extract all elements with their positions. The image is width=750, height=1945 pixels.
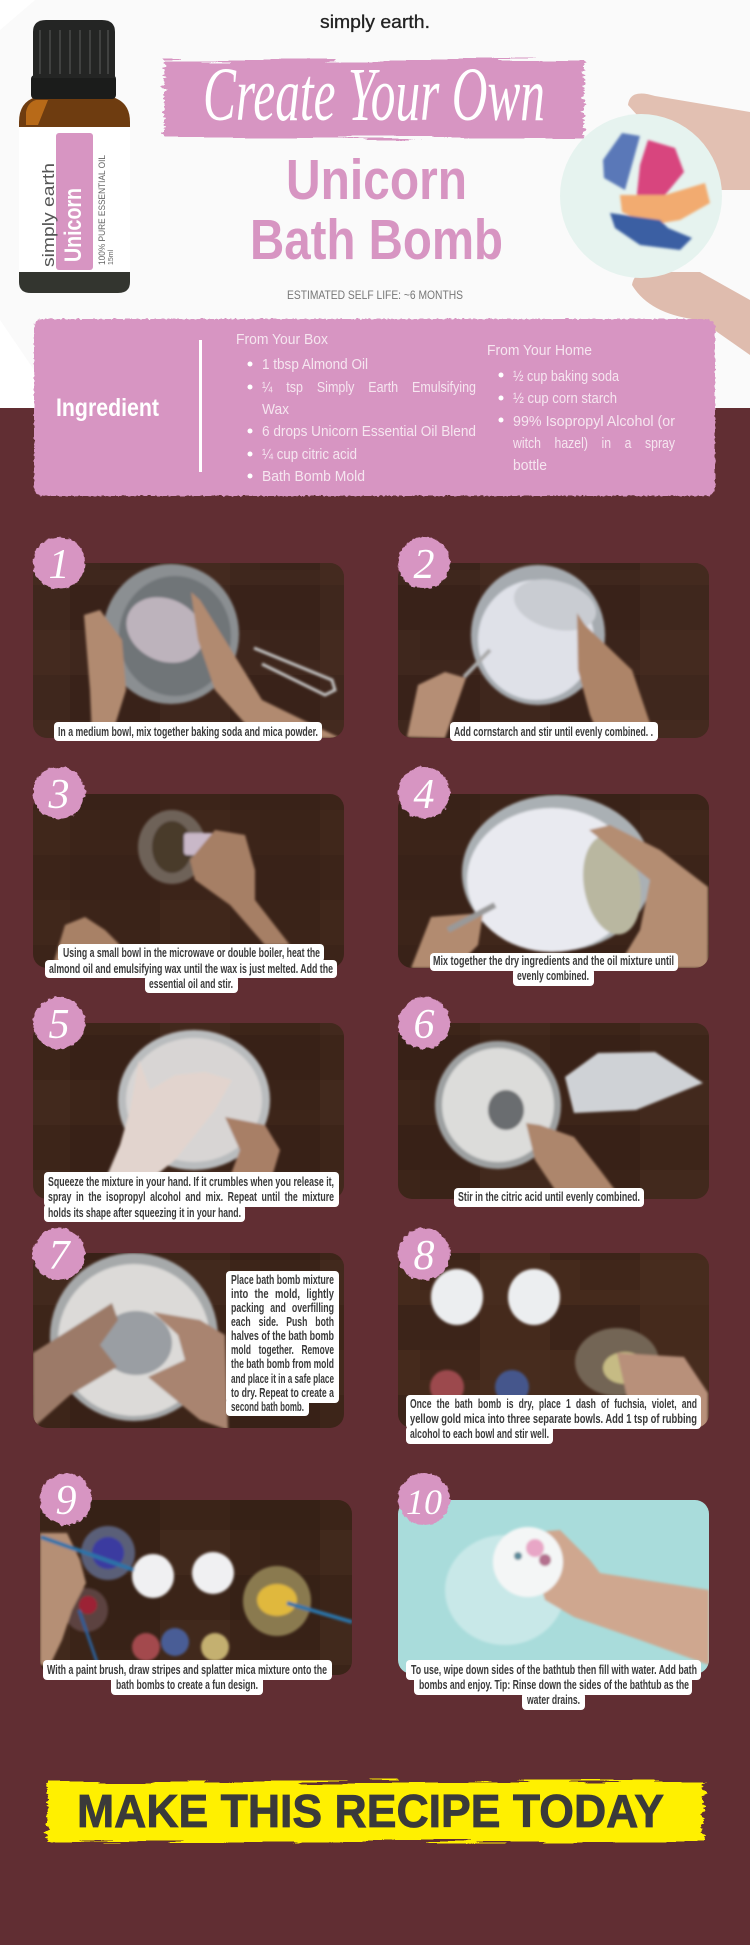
- caption: evenly combined.: [517, 969, 589, 983]
- caption: Add cornstarch and stir until evenly combined. .: [454, 725, 653, 739]
- heading: unicorn bath bomb: [250, 148, 503, 272]
- badge: 4: 4: [414, 772, 434, 818]
- badge: 1: [33, 537, 85, 589]
- icon: essential oil bottle: Unicorn: [60, 188, 87, 262]
- list: from your box: ¼ tsp Simply Earth Emulsifying: [262, 380, 476, 396]
- heading: unicorn bath bomb: Bath Bomb: [250, 208, 503, 272]
- photo: squeezing mixture: [33, 1023, 344, 1199]
- list: from your home: witch hazel) in a spray: [512, 436, 676, 452]
- list: from your box: 1 tbsp Almond Oil: [262, 357, 368, 373]
- banner: create your own: [164, 53, 584, 138]
- caption: [44, 1172, 339, 1222]
- caption: [406, 1395, 701, 1444]
- list: from your box: 6 drops Unicorn Essential Oil Blend: [262, 424, 476, 440]
- caption: In a medium bowl, mix together baking soda and mica powder.: [58, 725, 318, 739]
- logo: simply earth: simply earth.: [320, 12, 430, 32]
- badge: 2: 2: [414, 542, 434, 588]
- caption: spray in the isopropyl alcohol and mix. Repeat until the mixture: [48, 1190, 334, 1204]
- badge: 7: 7: [48, 1233, 72, 1279]
- icon: essential oil bottle: 15ml: [108, 249, 115, 265]
- caption: With a paint brush, draw stripes and splatter mica mixture onto the: [47, 1663, 327, 1677]
- step 5: [33, 997, 344, 1222]
- panel: ingredients: [34, 319, 715, 496]
- caption: the bath bomb from mold: [231, 1357, 334, 1371]
- badge: 3: 3: [48, 772, 70, 818]
- list: from your home: [487, 343, 676, 474]
- step 2: [398, 537, 709, 741]
- caption: Stir in the citric acid until evenly combined.: [458, 1190, 640, 1204]
- banner: make this recipe today: MAKE THIS RECIPE TODAY: [77, 1785, 664, 1837]
- icon: essential oil bottle: 100% PURE ESSENTIAL OIL: [97, 155, 107, 265]
- caption: [226, 1271, 339, 1416]
- caption: water drains.: [526, 1693, 580, 1707]
- caption: bath bombs to create a fun design.: [116, 1678, 258, 1692]
- heading: unicorn bath bomb: Unicorn: [286, 148, 467, 212]
- caption: to dry. Repeat to create a: [231, 1386, 335, 1400]
- list: from your box: ¼ cup citric acid: [262, 447, 357, 463]
- icon: essential oil bottle: simply earth: [39, 163, 58, 267]
- list: from your home: From Your Home: [487, 343, 592, 359]
- photo: painting bath bombs: [40, 1500, 352, 1675]
- caption: mold together. Remove: [231, 1343, 334, 1357]
- caption: [454, 1188, 644, 1207]
- caption: halves of the bath bomb: [231, 1329, 334, 1343]
- photo: hand holding painted bath bomb: [560, 93, 750, 355]
- caption: second bath bomb.: [231, 1400, 304, 1414]
- step 7: [33, 1228, 344, 1430]
- caption: [450, 722, 658, 741]
- banner: create your own: Create Your Own: [203, 53, 545, 137]
- step 10: [398, 1473, 709, 1710]
- list: from your home: ½ cup corn starch: [513, 391, 617, 407]
- ingredient heading: Ingredient: [56, 394, 160, 422]
- icon: essential oil bottle: [19, 20, 130, 293]
- caption: each side. Push both: [231, 1315, 334, 1329]
- badge: 6: 6: [414, 1002, 434, 1048]
- photo: mica in bowls: [398, 1253, 709, 1430]
- list: from your box: Wax: [262, 402, 290, 418]
- badge: 5: 5: [48, 1002, 70, 1048]
- caption: almond oil and emulsifying wax until the wax is just melted. Add the: [49, 962, 333, 976]
- caption: [406, 1660, 701, 1710]
- caption: Using a small bowl in the microwave or double boiler, heat the: [63, 946, 320, 960]
- step 3: [33, 767, 344, 993]
- photo: packing the mold: [33, 1253, 344, 1430]
- badge: 7: [33, 1228, 85, 1280]
- caption: Place bath bomb mixture: [231, 1273, 334, 1287]
- caption: [54, 722, 322, 741]
- photo: stirring citric acid: [398, 1023, 709, 1199]
- list: from your home: 99% Isopropyl Alcohol (or: [513, 414, 675, 430]
- badge: 1: 1: [48, 542, 70, 588]
- badge: 10: [398, 1473, 450, 1525]
- list: from your box: From Your Box: [236, 332, 329, 348]
- list: from your home: bottle: [513, 458, 547, 474]
- badge: 5: [33, 997, 85, 1049]
- caption: and place it in a safe place: [231, 1372, 334, 1386]
- badge: 3: [33, 767, 85, 819]
- list: from your home: ½ cup baking soda: [513, 369, 620, 385]
- badge: 2: [398, 537, 450, 589]
- caption: [45, 944, 337, 993]
- photo: mixing dry and oil: [398, 794, 709, 968]
- badge: 9: [40, 1473, 92, 1525]
- badge: 9: 9: [56, 1478, 76, 1524]
- badge: 8: [398, 1228, 450, 1280]
- caption: essential oil and stir.: [149, 977, 233, 991]
- badge: 4: [398, 767, 450, 819]
- caption: holds its shape after squeezing it in your hand.: [48, 1206, 241, 1220]
- step 8: [398, 1228, 709, 1444]
- step 1: [33, 537, 344, 741]
- caption: Squeeze the mixture in your hand. If it crumbles when you release it,: [48, 1175, 334, 1189]
- caption: alcohol to each bowl and stir well.: [410, 1427, 549, 1441]
- caption: into the mold, lightly: [231, 1287, 334, 1301]
- caption: packing and overfilling: [231, 1301, 334, 1315]
- photo: adding cornstarch: [398, 563, 709, 738]
- caption: [43, 1660, 332, 1695]
- step 4: [398, 767, 709, 986]
- list: from your box: Bath Bomb Mold: [262, 469, 365, 485]
- photo: sifting into bowl: [33, 563, 344, 738]
- text: estimated shelf life: ESTIMATED SELF LIFE: ~6 MONTHS: [287, 288, 463, 302]
- step 9: [40, 1473, 352, 1695]
- caption: [430, 953, 678, 986]
- badge: 6: [398, 997, 450, 1049]
- badge: 8: 8: [414, 1233, 434, 1279]
- step 6: [398, 997, 709, 1207]
- badge: 10: 10: [406, 1482, 442, 1522]
- list: from your box: [236, 332, 476, 485]
- photo: bath bomb in water: [398, 1500, 709, 1674]
- photo: small bowl and essential oil: [33, 794, 344, 968]
